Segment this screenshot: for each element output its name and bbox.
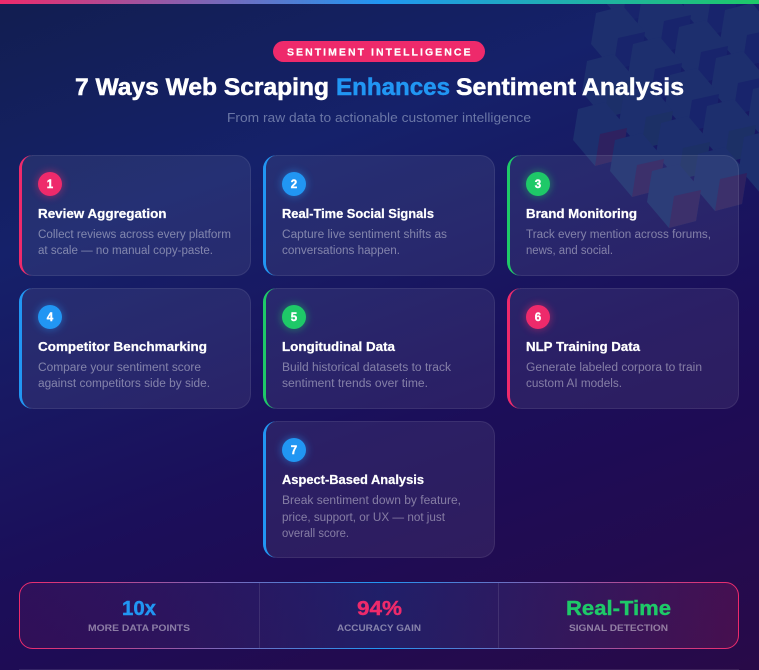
card 2: Real-Time Social Signals: 2 [291,179,297,191]
card 1: Review Aggregation: Collect reviews across every platform [38,229,231,241]
title: Sentiment Analysis [456,74,684,101]
card 7: Aspect-Based Analysis: Break sentiment down by feature, [282,495,461,507]
top accent bar [0,0,759,4]
card 5: Longitudinal Data: sentiment trends over time. [282,378,428,390]
card 6: NLP Training Data: Generate labeled corpora to train [526,362,702,374]
card 1: Review Aggregation: at scale — no manual copy-paste. [38,245,213,257]
card 3: Brand Monitoring [507,155,738,276]
card 5: Longitudinal Data: Build historical datasets to track [282,362,451,374]
stats bar [20,582,738,648]
card 7: Aspect-Based Analysis: Aspect-Based Analysis [282,472,424,487]
stat: 10x more data points: 10x [122,597,157,620]
title [75,74,684,101]
stat: real-time signal detection: Real-Time [566,597,671,620]
stat: 94% accuracy gain [337,597,421,634]
card 3: Brand Monitoring: 3 [535,179,541,191]
card 4: Competitor Benchmarking: Compare your sentiment score [38,362,201,374]
decorative cube pattern [573,0,759,228]
stat: 10x more data points: MORE DATA POINTS [88,623,190,634]
card 7: Aspect-Based Analysis: price, support, or UX — not just [282,512,446,524]
stat: real-time signal detection [566,597,671,634]
stat: 94% accuracy gain: ACCURACY GAIN [337,623,421,634]
card 3: Brand Monitoring: Track every mention across forums, [526,229,711,241]
card 5: Longitudinal Data: 5 [291,312,298,324]
card 4: Competitor Benchmarking: Competitor Benchmarking [38,339,207,354]
card 2: Real-Time Social Signals: Capture live sentiment shifts as [282,229,447,241]
card 2: Real-Time Social Signals: Real-Time Social Signals [282,206,434,221]
card 6: NLP Training Data: NLP Training Data [526,339,641,354]
stat: real-time signal detection: SIGNAL DETECTION [569,623,668,634]
badge pill [273,41,485,62]
card 7: Aspect-Based Analysis: overall score. [282,528,349,540]
badge pill: SENTIMENT INTELLIGENCE [287,46,470,58]
card 6: NLP Training Data: 6 [535,312,541,324]
card 2: Real-Time Social Signals [263,155,494,276]
card 4: Competitor Benchmarking: 4 [47,312,54,324]
card 4: Competitor Benchmarking [19,288,250,409]
subtitle: From raw data to actionable customer intelligence [227,111,531,125]
card 1: Review Aggregation [19,155,250,276]
card 1: Review Aggregation: Review Aggregation [38,206,167,221]
card 5: Longitudinal Data [263,288,494,409]
title: Enhances [336,74,450,101]
card 7: Aspect-Based Analysis: 7 [291,445,297,457]
card 7: Aspect-Based Analysis [263,421,494,558]
card 3: Brand Monitoring: Brand Monitoring [526,206,637,221]
stat: 94% accuracy gain: 94% [357,597,402,620]
card 3: Brand Monitoring: news, and social. [526,245,613,257]
card 6: NLP Training Data: custom AI models. [526,378,622,390]
card 2: Real-Time Social Signals: conversations happen. [282,245,400,257]
card 6: NLP Training Data [507,288,738,409]
header [75,41,684,125]
stat: 10x more data points [88,597,190,634]
card 1: Review Aggregation: 1 [47,179,54,191]
title: 7 Ways Web Scraping [75,74,329,101]
card 5: Longitudinal Data: Longitudinal Data [282,339,396,354]
card 4: Competitor Benchmarking: against competitors side by side. [38,378,210,390]
